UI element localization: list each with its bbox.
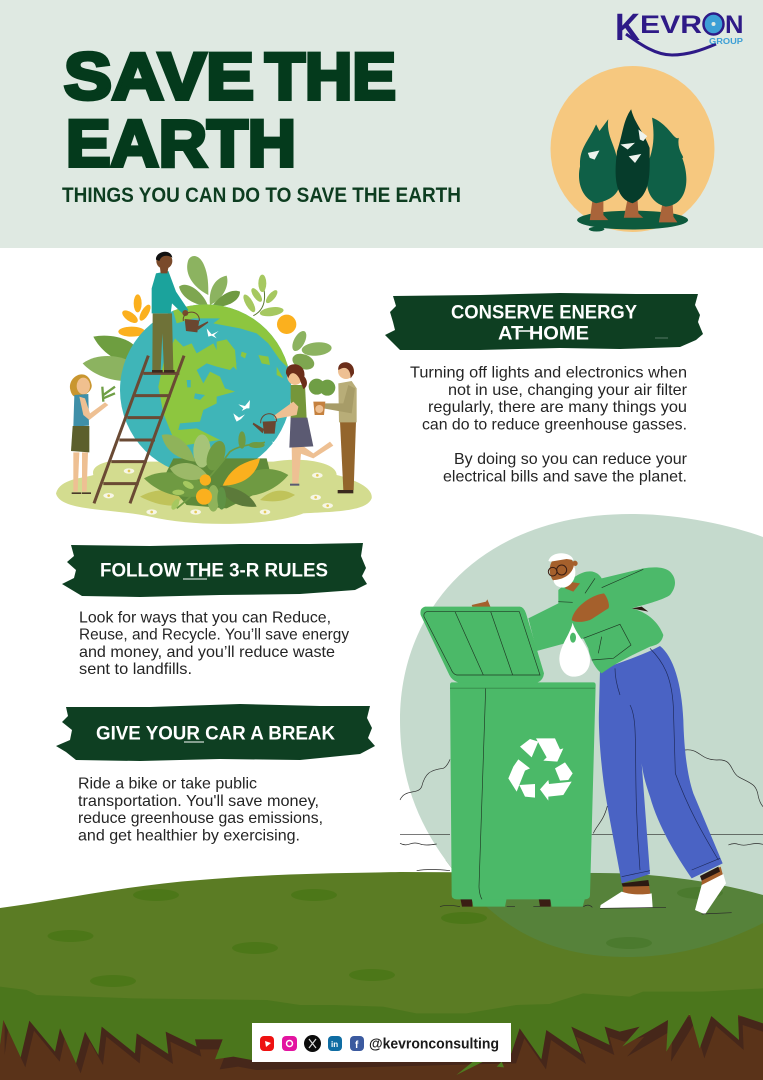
- shoes and ankles: [600, 867, 726, 914]
- butterflies and daisies: [103, 328, 333, 515]
- hill: [0, 860, 763, 1015]
- landscape outlines: [400, 750, 763, 845]
- icon: linkedin: [328, 1036, 342, 1051]
- heading banner: FOLLOW THE 3-R RULES: [100, 560, 328, 582]
- body text: Reuse, and Recycle. You’ll save energy: [79, 626, 349, 644]
- logo: N: [725, 11, 744, 39]
- logo: EVR: [640, 11, 702, 39]
- illustration: people caring for the globe: [56, 252, 372, 524]
- foliage: [140, 431, 295, 512]
- heading banner: [62, 543, 367, 597]
- icon: facebook: f: [355, 1040, 359, 1051]
- icon: x: [304, 1035, 321, 1052]
- soil and grass edge: [0, 987, 763, 1080]
- title: EARTH: [66, 106, 296, 180]
- bin: [420, 607, 596, 907]
- body text: regularly, there are many things you: [428, 399, 687, 416]
- ground squiggles: [417, 869, 732, 914]
- body text: [79, 610, 349, 678]
- plastic bag: [559, 623, 590, 677]
- body text: can do to reduce greenhouse gasses.: [422, 416, 687, 434]
- hill patches: [48, 887, 723, 987]
- body text: transportation. You'll save money,: [78, 793, 319, 810]
- panel: conserve energy: [385, 293, 703, 486]
- subtitle: THINGS YOU CAN DO TO SAVE THE EARTH: [62, 183, 461, 207]
- body text: [78, 776, 323, 844]
- icon: instagram: [282, 1036, 297, 1051]
- body text: and get healthier by exercising.: [78, 828, 300, 844]
- watering can: [183, 312, 208, 332]
- background circle: [400, 514, 763, 957]
- icon: facebook: [350, 1036, 364, 1051]
- trousers: [599, 646, 723, 883]
- bin lid: [420, 607, 544, 683]
- jacket: [528, 567, 675, 673]
- title: SAVE: [64, 39, 254, 113]
- heading banner: [56, 704, 375, 761]
- body text: and money, and you’ll reduce waste: [79, 644, 335, 661]
- body text: not in use, changing your air filter: [448, 382, 688, 399]
- body text: reduce greenhouse gas emissions,: [78, 810, 323, 827]
- head: [548, 553, 580, 592]
- icon: linkedin: in: [331, 1040, 338, 1049]
- back leaves: [83, 256, 332, 381]
- title: THE: [265, 39, 396, 113]
- heading banner: [385, 293, 703, 350]
- icon: recycle symbol: [508, 738, 573, 801]
- globe: [120, 304, 292, 468]
- woman with sprout: [70, 374, 115, 494]
- hand on lid: [472, 599, 491, 613]
- ground: [56, 460, 372, 524]
- logo: [615, 7, 744, 55]
- body text: Ride a bike or take public: [78, 776, 257, 792]
- panel: follow the 3-R rules: [62, 543, 367, 678]
- body text: sent to landfills.: [79, 661, 192, 678]
- icon: video: [260, 1036, 274, 1051]
- panel: header: [0, 0, 763, 248]
- icon: trees on orange sun: [550, 66, 714, 232]
- illustration: man putting bag in recycling bin: [417, 553, 732, 914]
- woman watering: [274, 364, 333, 486]
- second watering can: [253, 414, 277, 434]
- man with potted plant: [309, 362, 357, 493]
- ladder: [94, 356, 184, 503]
- panel: give your car a break: [56, 704, 375, 844]
- heading banner: CONSERVE ENERGY: [451, 302, 637, 324]
- handle: @kevronconsulting: [369, 1036, 499, 1052]
- social media bar: [252, 1023, 511, 1062]
- title: [64, 39, 396, 180]
- heading banner: GIVE YOUR CAR A BREAK: [96, 722, 335, 744]
- logo: K: [615, 7, 640, 49]
- body text: Look for ways that you can Reduce,: [79, 610, 331, 626]
- body text: Turning off lights and electronics when: [410, 364, 687, 382]
- heading banner: AT HOME: [498, 322, 589, 344]
- body text: electrical bills and save the planet.: [443, 468, 687, 486]
- person on ladder: [152, 252, 188, 373]
- body text: [410, 364, 688, 486]
- body text: By doing so you can reduce your: [454, 451, 688, 468]
- logo: GROUP: [709, 37, 744, 46]
